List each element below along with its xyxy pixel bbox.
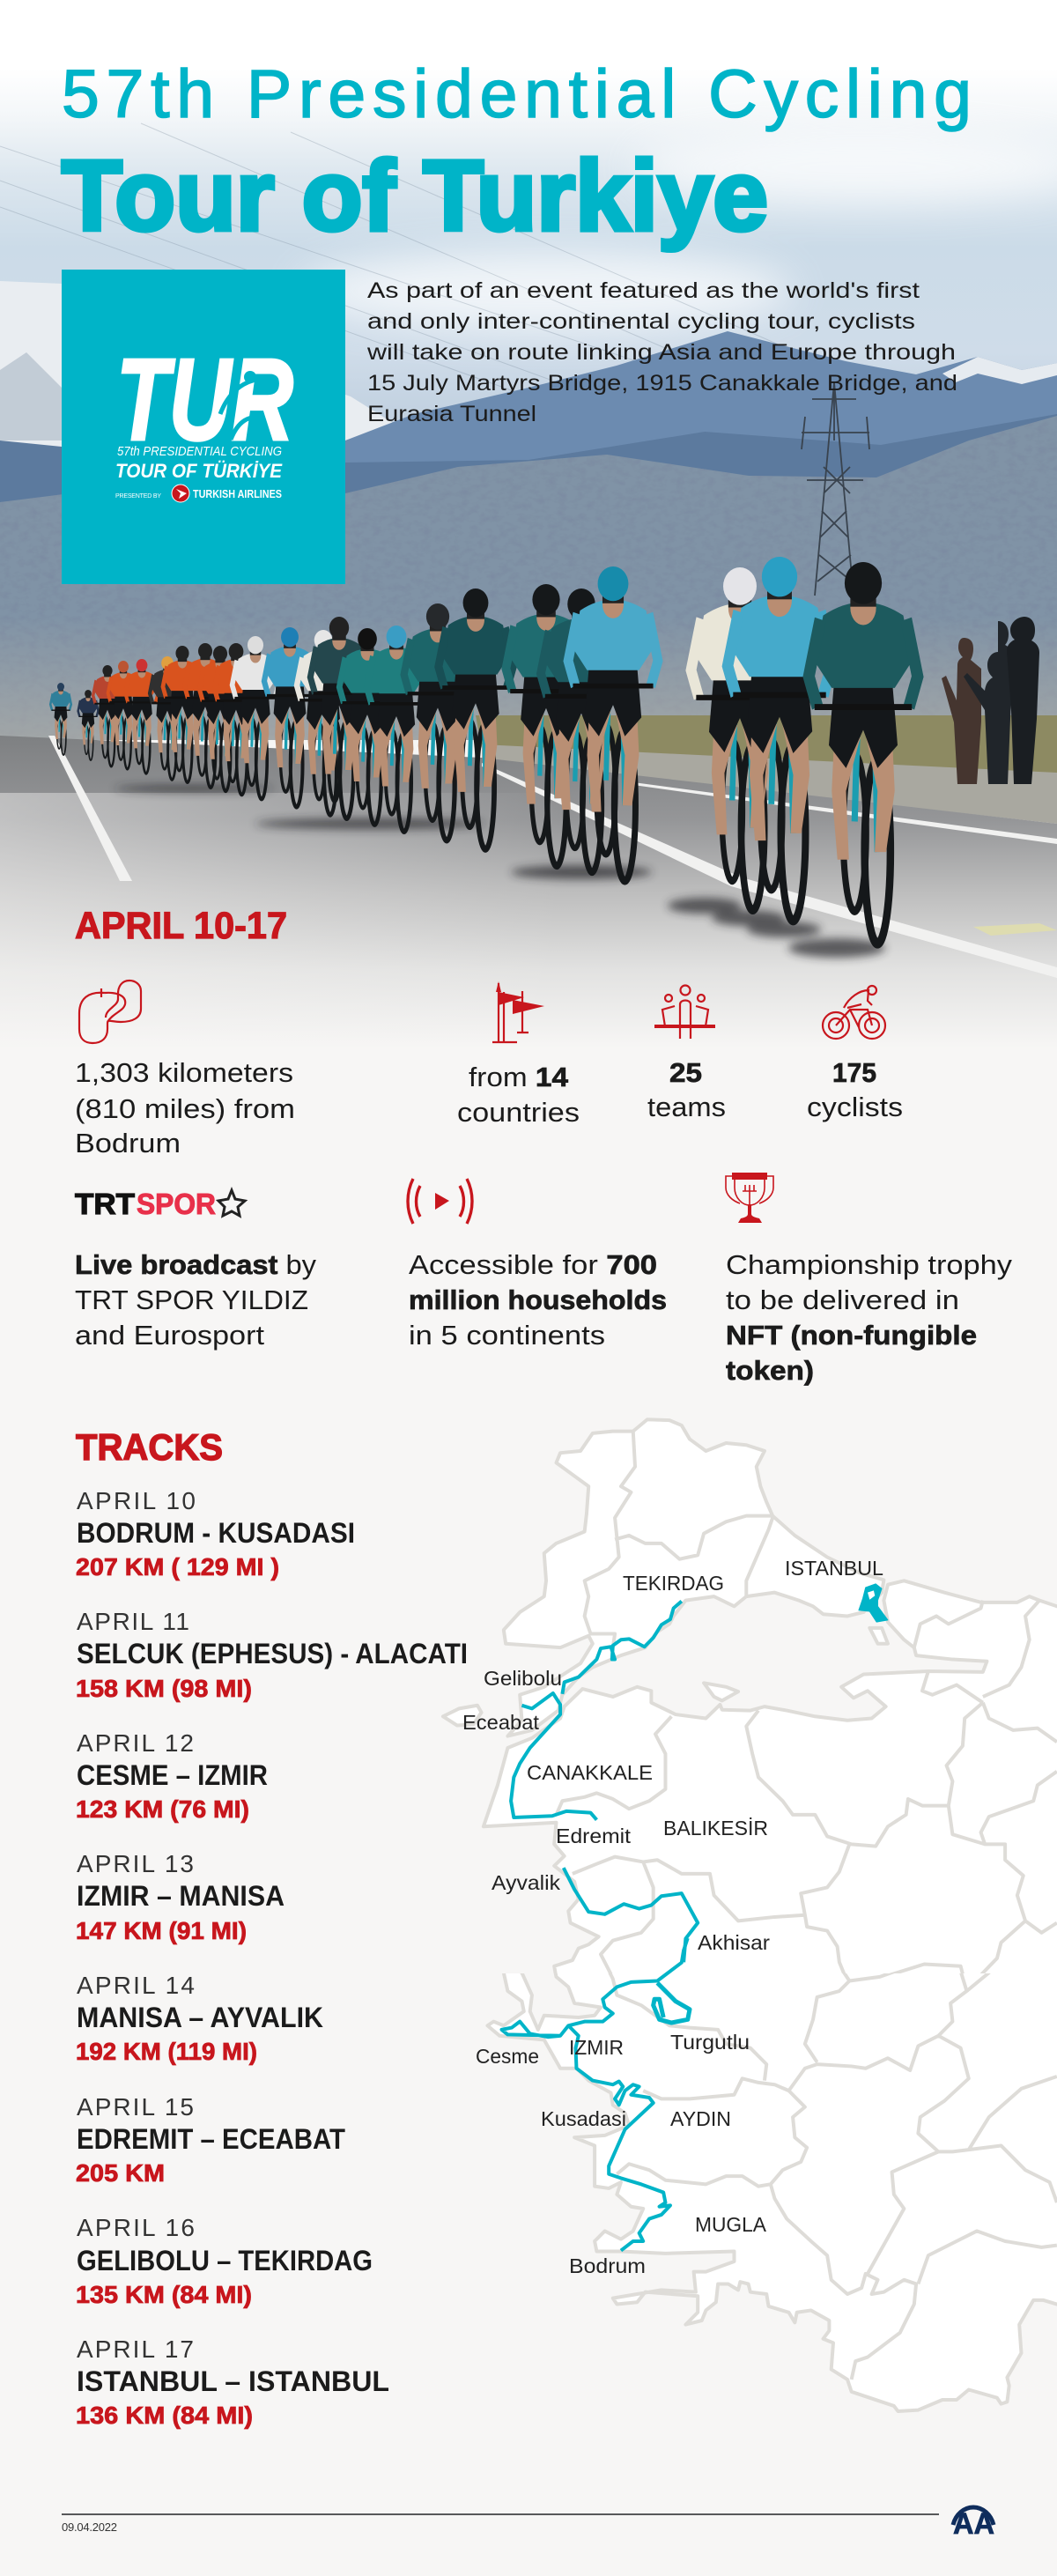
map labels: ISTANBUL	[785, 1557, 883, 1580]
heading: April 10-17: APRIL 10-17	[75, 905, 287, 947]
power lines	[0, 123, 1057, 564]
peloton	[50, 557, 918, 944]
stage: April 13: 147 KM (91 MI)	[76, 1917, 247, 1944]
stage: April 13	[76, 1850, 285, 1944]
near mottled range	[0, 416, 1057, 740]
sky	[0, 0, 1057, 458]
stage: April 15: EDREMIT – ECEABAT	[77, 2123, 345, 2155]
icon: flags	[492, 981, 544, 1042]
electricity pylon	[802, 382, 869, 596]
stage: April 17	[76, 2335, 389, 2429]
presented by: PRESENTED BY	[115, 493, 161, 500]
snowy mountain left	[0, 281, 414, 493]
stage: April 14: 192 KM (119 MI)	[76, 2038, 257, 2065]
road side fade	[0, 793, 564, 1057]
stage: April 16	[76, 2214, 373, 2308]
text: NFT trophy: to be delivered in	[726, 1284, 959, 1315]
stat: route length: (810 miles) from	[75, 1093, 295, 1124]
stage: April 14	[76, 1972, 323, 2065]
intro paragraph: and only inter-continental cycling tour, cyclists	[367, 309, 915, 334]
map labels: Turgutlu	[670, 2031, 750, 2054]
text: households: million households	[409, 1284, 667, 1315]
stage: April 16: 135 KM (84 MI)	[76, 2281, 252, 2308]
stage: April 11: APRIL 11	[77, 1608, 191, 1635]
map labels: Kusadasi	[541, 2107, 626, 2130]
stage: April 15: 205 KM	[76, 2159, 165, 2187]
logo: TRT Spor: SPOR	[137, 1188, 216, 1220]
map labels: BALIKESİR	[663, 1817, 768, 1839]
clouds	[299, 132, 1057, 330]
map labels: AYDIN	[670, 2107, 731, 2130]
map labels: Akhisar	[698, 1931, 770, 1954]
stat: cyclists	[807, 1057, 903, 1122]
map labels: Ayvalik	[492, 1871, 561, 1894]
stage: April 10	[76, 1487, 355, 1580]
stage: April 17: ISTANBUL – ISTANBUL	[77, 2365, 389, 2397]
intro paragraph: Eurasia Tunnel	[367, 402, 536, 426]
stage: April 11: SELCUK (EPHESUS) - ALACATI	[77, 1638, 468, 1669]
stat: teams: teams	[647, 1092, 726, 1122]
icon: live stream	[408, 1179, 472, 1224]
text: live broadcast: and Eurosport	[75, 1320, 264, 1351]
stat: teams	[647, 1057, 726, 1122]
Turkish Airlines mark: TURKISH AIRLINES	[193, 487, 282, 500]
text: NFT trophy	[726, 1249, 1013, 1386]
map labels: Gelibolu	[484, 1667, 562, 1690]
date: 09.04.2022	[62, 2520, 117, 2534]
snow caps right	[942, 357, 1057, 384]
text: live broadcast: TRT SPOR YILDIZ	[75, 1284, 308, 1315]
title: Tour of Turkiye: Tour of Turkiye	[62, 140, 768, 251]
route: northern stages	[511, 1584, 888, 1962]
stage: April 10: 207 KM ( 129 MI )	[76, 1553, 279, 1580]
stage: April 17: APRIL 17	[77, 2335, 196, 2363]
stage: April 12: CESME – IZMIR	[77, 1759, 268, 1791]
stat: route length: Bodrum	[75, 1128, 181, 1158]
map labels: TEKIRDAG	[623, 1572, 724, 1595]
stage: April 16: APRIL 16	[77, 2214, 196, 2241]
stage: April 13: IZMIR – MANISA	[77, 1880, 285, 1912]
spectators	[942, 617, 1039, 784]
footer	[62, 2507, 994, 2541]
stage: April 15	[76, 2093, 345, 2187]
rider shadows	[115, 785, 885, 958]
stat: route length: 1,303 kilometers	[75, 1057, 293, 1088]
text: households	[409, 1249, 667, 1351]
map labels: Edremit	[556, 1825, 632, 1847]
far blue range	[345, 331, 1057, 564]
middle range	[0, 414, 1057, 740]
logo: TRT Spor: TRT	[75, 1188, 135, 1220]
stage: April 14: MANISA – AYVALIK	[77, 2002, 323, 2033]
stat: countries: from 14	[469, 1062, 569, 1092]
icon: cyclist	[823, 986, 885, 1039]
logo wordmark TUR: TUR	[116, 335, 293, 464]
map labels: IZMIR	[569, 2036, 624, 2059]
intro paragraph: will take on route linking Asia and Europe through	[366, 340, 956, 365]
stat: cyclists: cyclists	[807, 1092, 903, 1122]
map of western Turkiye	[443, 1419, 1057, 2411]
stage: April 10: APRIL 10	[77, 1487, 197, 1514]
stage: April 10: BODRUM - KUSADASI	[77, 1517, 355, 1549]
map: southern land and provinces	[486, 1973, 1057, 2413]
road markings	[48, 736, 1057, 978]
text: live broadcast	[75, 1249, 317, 1351]
text: NFT trophy: token)	[726, 1355, 814, 1386]
map labels: Cesme	[476, 2045, 539, 2068]
stage: April 13: APRIL 13	[77, 1850, 196, 1877]
title: 57th Presidential Cycling: 57th Presidential Cycling	[62, 56, 972, 132]
text: NFT trophy: Championship trophy	[726, 1249, 1013, 1280]
text: NFT trophy: NFT (non-fungible	[726, 1320, 977, 1351]
icon: Anadolu Agency logo: AA	[953, 2507, 994, 2541]
intro paragraph: As part of an event featured as the world's first	[367, 278, 920, 303]
stage: April 17: 136 KM (84 MI)	[76, 2402, 253, 2429]
intro paragraph: 15 July Martyrs Bridge, 1915 Canakkale Bridge, and	[367, 371, 957, 396]
stage: April 16: GELIBOLU – TEKIRDAG	[77, 2245, 373, 2276]
valley haze	[0, 617, 1057, 740]
Turkish Airlines mark	[172, 485, 282, 502]
map labels	[462, 1557, 883, 2277]
icon: team	[654, 985, 715, 1039]
intro paragraph	[366, 278, 957, 426]
verge and grass	[476, 715, 1057, 784]
stage: April 14: APRIL 14	[77, 1972, 196, 1999]
map labels: MUGLA	[695, 2213, 767, 2236]
logo panel	[62, 270, 345, 584]
heading: Tracks: TRACKS	[76, 1426, 223, 1468]
stage: April 11	[76, 1608, 468, 1702]
text: households: Accessible for 700	[409, 1249, 657, 1280]
map: northern land and provinces	[441, 1418, 1057, 1973]
map labels: Bodrum	[569, 2254, 646, 2277]
logo text: 57th Presidential Cycling: 57th PRESIDENTIAL CYCLING	[117, 444, 282, 459]
stat: route length	[75, 1057, 295, 1158]
stage: April 12	[76, 1729, 268, 1823]
icon: route	[79, 981, 141, 1043]
hero photo: mountain road with cycling peloton	[0, 0, 1057, 1057]
stage: April 12: APRIL 12	[77, 1729, 196, 1757]
stage: April 15: APRIL 15	[77, 2093, 196, 2121]
logo text: Tour of Turkiye: TOUR OF TÜRKİYE	[115, 460, 283, 482]
road surface	[0, 736, 1057, 1057]
map labels: CANAKKALE	[527, 1761, 653, 1784]
map labels: Eceabat	[462, 1711, 540, 1734]
stat: countries: countries	[457, 1097, 580, 1128]
stat: teams: 25	[669, 1057, 702, 1088]
logo: TRT Spor	[75, 1188, 245, 1220]
route: southern stages	[502, 1938, 690, 2251]
stat: countries	[457, 1062, 580, 1128]
text: live broadcast: Live broadcast by	[75, 1249, 317, 1280]
stage: April 12: 123 KM (76 MI)	[76, 1795, 249, 1823]
stage: April 11: 158 KM (98 MI)	[76, 1675, 252, 1702]
stat: cyclists: 175	[832, 1057, 876, 1088]
icon: NFT trophy	[726, 1173, 773, 1223]
concrete barrier	[482, 744, 1057, 824]
text: households: in 5 continents	[409, 1320, 605, 1351]
